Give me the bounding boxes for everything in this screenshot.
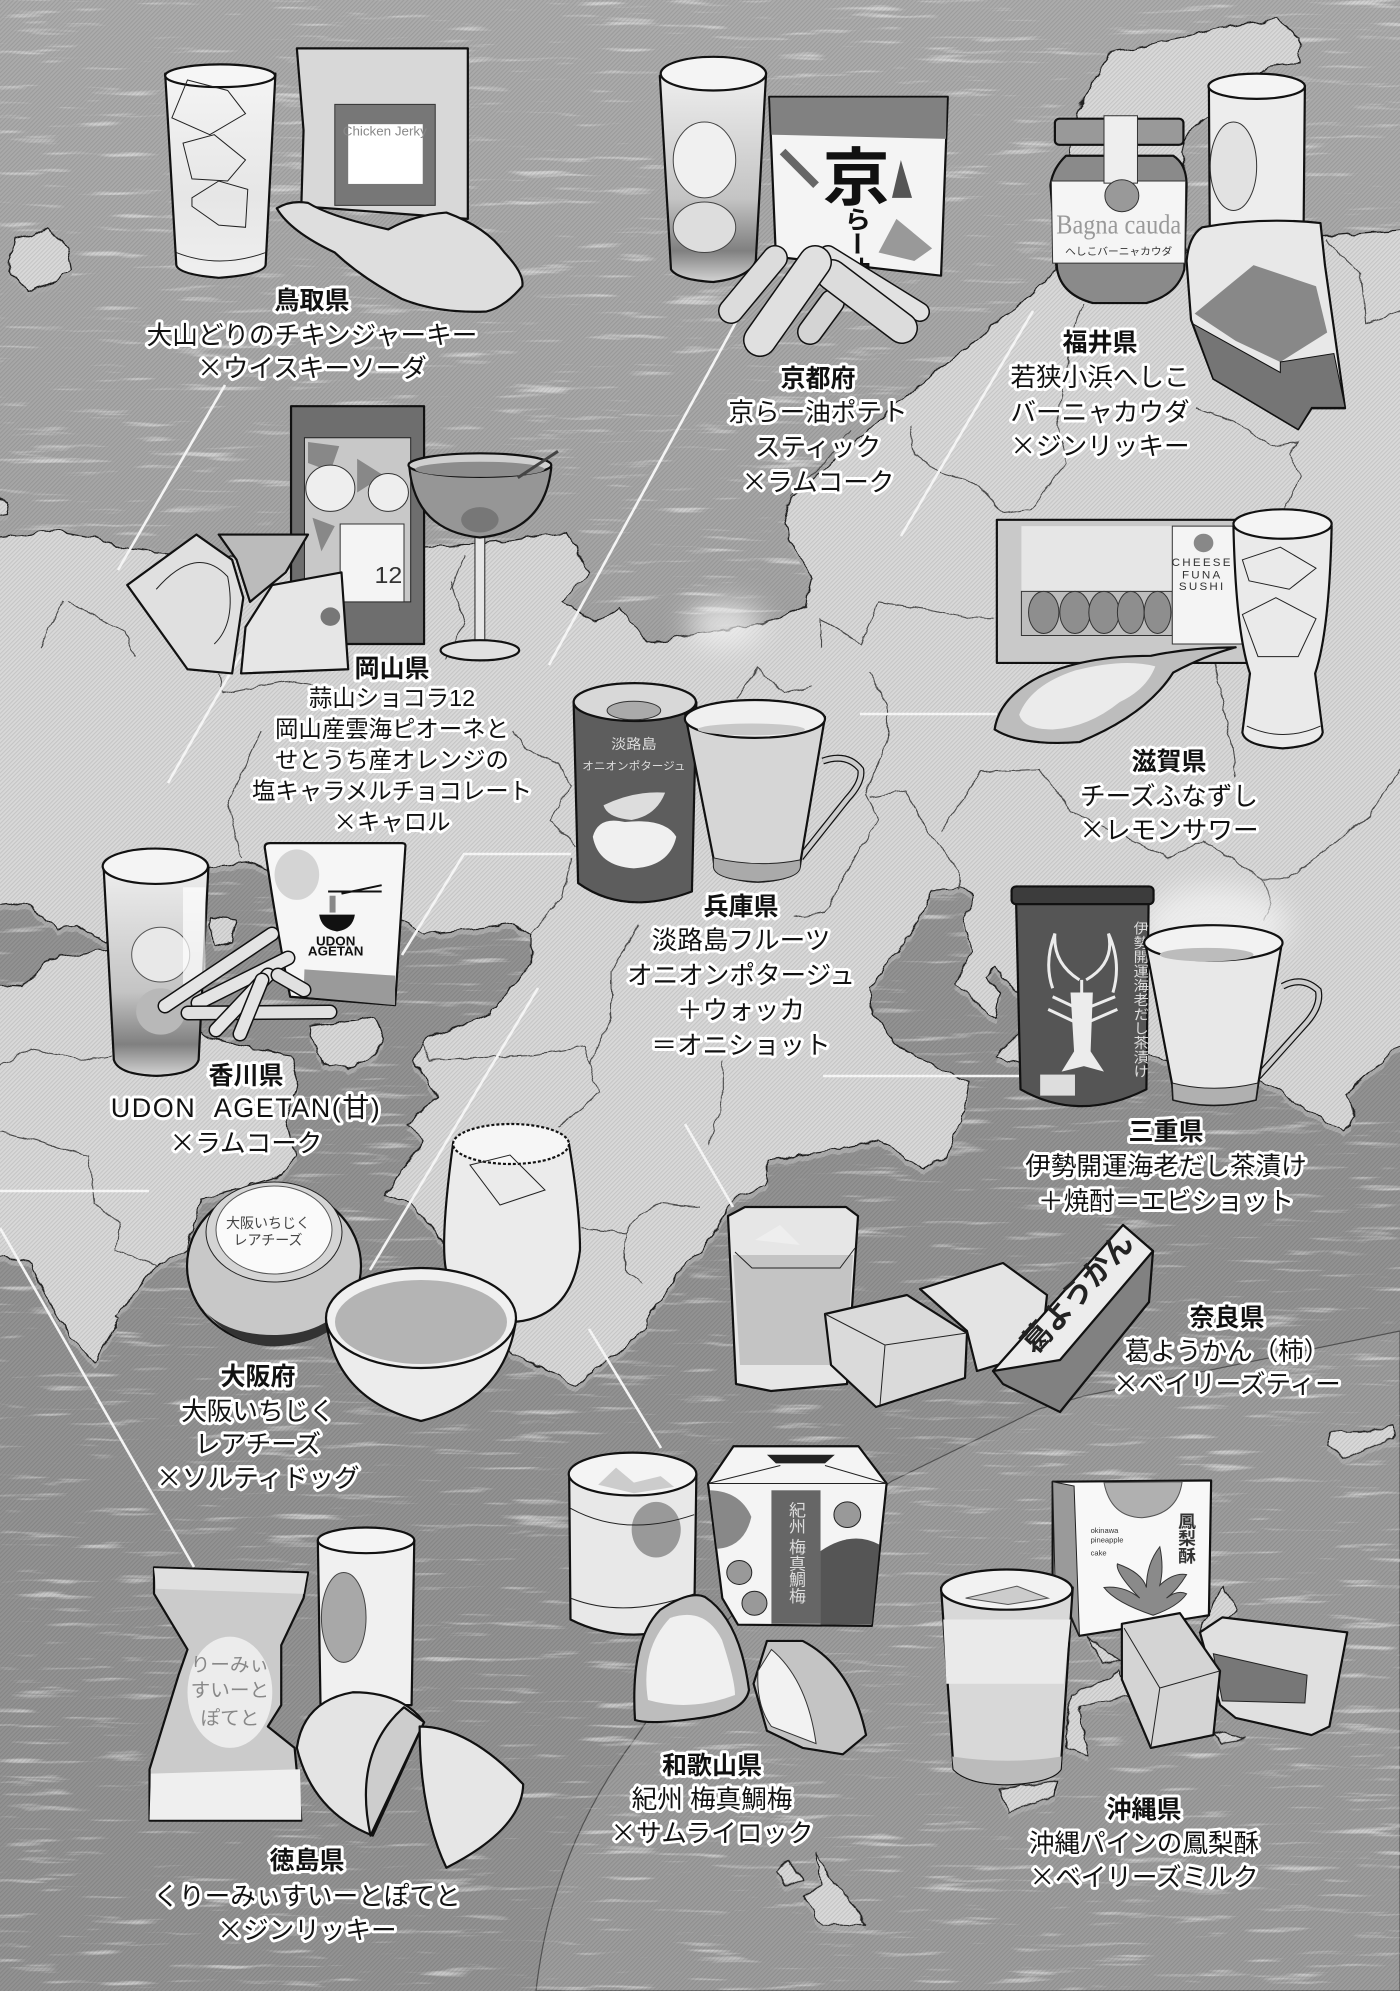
icon: chocolate pieces xyxy=(127,535,348,673)
label: Hyogo: オニオンポタージュ xyxy=(627,961,855,990)
food illustration: Hyogo xyxy=(574,683,696,902)
icon: manju half left xyxy=(634,1595,749,1722)
icon: onion potage can: オニオンポタージュ xyxy=(582,760,686,772)
icon: chicken jerky bag: Chicken Jerky xyxy=(343,124,427,138)
icon: ume tai box: 紀州 梅真鯛梅 xyxy=(786,1501,806,1604)
food illustration: Tottori xyxy=(165,48,523,312)
panel: Mie xyxy=(1012,886,1319,1216)
icon: ochazuke tin xyxy=(1012,886,1154,1106)
panel: Okinawa xyxy=(941,1480,1347,1894)
icon: bagna cauda jar: Bagna cauda xyxy=(1056,209,1181,240)
icon: chocolate box xyxy=(291,406,424,644)
food illustration: Kagawa xyxy=(103,843,405,1076)
panel: Tottori xyxy=(147,48,523,385)
map: southern islands xyxy=(776,1426,1393,1924)
map: Atsumi tip xyxy=(995,1030,1021,1063)
label: Tokushima: 徳島県 xyxy=(269,1847,345,1875)
label: Okinawa: 沖縄県 xyxy=(1106,1796,1182,1824)
label: Wakayama: 和歌山県 xyxy=(662,1752,762,1780)
icon: bagna cauda jar xyxy=(1050,116,1187,303)
icon: cheese funazushi slice xyxy=(995,647,1236,743)
label: Kagawa: ×ラムコーク xyxy=(170,1123,322,1160)
background: lighter open sea beyond curve xyxy=(536,1331,1400,1991)
icon: pineapple cake box: cake xyxy=(1091,1548,1107,1557)
label: Osaka: 大阪府 xyxy=(220,1363,296,1391)
label: Wakayama: 紀州 梅真鯛梅 xyxy=(632,1785,792,1814)
label: Kagawa: UDON AGETAN(甘) xyxy=(111,1093,381,1123)
label: Kyoto: ×ラムコーク xyxy=(742,462,894,499)
icon: cheese funazushi box: FUNA xyxy=(1182,570,1222,582)
icon: potato sticks xyxy=(731,255,920,340)
food illustration: Kyoto xyxy=(660,57,948,282)
icon: udon agetan bag xyxy=(265,843,405,1005)
map: top-left island xyxy=(0,227,71,516)
label: Kagawa: 香川県 xyxy=(208,1062,284,1090)
label: Okayama: 蒜山ショコラ12 xyxy=(309,685,475,711)
label: Fukui: バーニャカウダ xyxy=(1010,398,1190,427)
icon: baileys milk glass xyxy=(941,1569,1073,1784)
icon: samurai rock glass xyxy=(569,1453,696,1635)
panel: Osaka xyxy=(156,1124,580,1495)
label: Tottori: 大山どりのチキンジャーキー xyxy=(147,321,477,350)
icon: baileys tea glass xyxy=(728,1207,858,1391)
map: Awaji and small islands xyxy=(210,917,384,1068)
label: Kyoto: スティック xyxy=(755,434,881,462)
icon: fig rare cheese: レアチーズ xyxy=(233,1232,303,1248)
food illustration: Wakayama glass xyxy=(569,1453,696,1635)
icon: Kyoto chili oil potato stick bag xyxy=(769,97,948,282)
icon: fig rare cheese xyxy=(187,1182,361,1346)
icon: pineapple cake box: pineapple xyxy=(1091,1536,1123,1544)
label: Tokushima: くりーみぃすいーとぽてと xyxy=(153,1882,461,1911)
icon: gin rickey glass xyxy=(1208,74,1305,236)
icon: bagna cauda jar: へしこバーニャカウダ xyxy=(1065,245,1172,258)
icon: manju half right xyxy=(754,1641,866,1754)
panel: Fukui xyxy=(1010,74,1345,463)
icon: pineapple cake pieces xyxy=(1122,1613,1347,1748)
icon: sweet potato bag: すいーと xyxy=(191,1681,269,1701)
label: Okayama: 岡山産雲海ピオーネと xyxy=(275,716,509,742)
icon: yokan blocks xyxy=(825,1263,1047,1407)
label: Okayama: ×キャロル xyxy=(334,803,450,837)
panel: Kyoto xyxy=(660,57,948,499)
label: Kyoto: 京都府 xyxy=(780,365,856,393)
icon: toast with bagna cauda xyxy=(1187,221,1345,429)
icon: pineapple cake box: okinawa xyxy=(1091,1526,1119,1535)
icon: sweet potato halves xyxy=(297,1692,523,1868)
map: Honshu xyxy=(0,19,1400,1388)
label: Wakayama: ×サムライロック xyxy=(611,1813,813,1850)
label: Okayama: 岡山県 xyxy=(354,655,430,683)
panel: Wakayama xyxy=(569,1446,887,1850)
label: Okayama: せとうち産オレンジの xyxy=(275,747,509,773)
icon: onion potage can xyxy=(574,683,696,902)
map: soft white glows xyxy=(687,603,1290,965)
label: Fukui: 若狭小浜へしこ xyxy=(1010,363,1190,392)
icon: lemon sour glass xyxy=(1233,509,1332,748)
icon: soup bowl xyxy=(326,1268,516,1421)
label: Hyogo: ＋ウォッカ xyxy=(677,997,805,1025)
label: Tottori: 鳥取県 xyxy=(274,287,350,315)
label: Osaka: 大阪いちじく xyxy=(181,1397,335,1426)
panel: Kagawa xyxy=(103,843,405,1160)
leader lines xyxy=(0,311,1033,1567)
label: Shiga: 滋賀県 xyxy=(1131,748,1207,776)
food illustration: Okayama xyxy=(127,406,558,673)
icon: rum and coke glass xyxy=(660,57,766,282)
label: Fukui: ×ジンリッキー xyxy=(1010,426,1190,463)
food illustration: Mie xyxy=(1012,886,1319,1106)
panel: Okayama xyxy=(127,406,558,837)
icon: sweet potato bag: ぽてと xyxy=(200,1708,259,1729)
icon: rum and coke glass xyxy=(103,849,208,1076)
icon: onion potage can: 淡路島 xyxy=(611,737,657,753)
icon: fig rare cheese: 大阪いちじく xyxy=(226,1215,310,1231)
label: Nara: 奈良県 xyxy=(1189,1304,1265,1332)
map: prefecture borders xyxy=(0,240,1400,1283)
icon: onishot cup xyxy=(685,700,861,882)
label: Tottori: ×ウイスキーソーダ xyxy=(197,348,427,385)
food illustration: Okinawa xyxy=(941,1480,1347,1784)
icon: pineapple cake box xyxy=(1053,1480,1211,1636)
panel: Shiga xyxy=(995,509,1332,847)
label: Fukui: 福井県 xyxy=(1062,329,1138,357)
icon: Kyoto chili oil potato stick bag: らー油 xyxy=(841,206,872,282)
map: Shikoku xyxy=(0,950,299,1363)
icon: pineapple cake box: 鳳梨酥 xyxy=(1176,1513,1197,1564)
icon: udon agetan bag: AGETAN xyxy=(308,944,363,958)
label: Nara: 葛ようかん（柿） xyxy=(1125,1337,1329,1366)
panel: Nara xyxy=(728,1207,1341,1412)
label: Tokushima: ×ジンリッキー xyxy=(217,1910,397,1947)
label: Mie: ＋焼酎＝エビショット xyxy=(1038,1187,1294,1216)
label: Hyogo: ＝オニショット xyxy=(651,1032,831,1060)
icon: ume tai box xyxy=(708,1446,887,1626)
icon: yokan box xyxy=(993,1225,1153,1412)
label: Osaka: レアチーズ xyxy=(195,1430,321,1459)
label: Kyoto: 京らー油ポテト xyxy=(728,398,908,427)
icon: sweet potato bag: りーみぃ xyxy=(191,1655,269,1676)
label: Osaka: ×ソルティドッグ xyxy=(156,1458,360,1495)
icon: udon agetan bag: UDON xyxy=(316,934,355,948)
food illustration: funazushi slice xyxy=(995,647,1236,743)
icon: carol cocktail coupe xyxy=(408,451,558,660)
label: Nara: ×ベイリーズティー xyxy=(1113,1364,1341,1401)
label: Hyogo: 兵庫県 xyxy=(703,893,779,921)
food illustration: Shiga xyxy=(997,509,1332,748)
panel: Hyogo xyxy=(574,683,861,1060)
icon: salty dog glass xyxy=(444,1124,580,1322)
icon: chicken jerky bag xyxy=(297,48,468,219)
label: Shiga: ×レモンサワー xyxy=(1079,810,1259,847)
label: Okinawa: ×ベイリーズミルク xyxy=(1029,1857,1259,1894)
food illustration: Fukui xyxy=(1050,74,1345,429)
icon: udon fries xyxy=(165,934,330,1034)
food illustration: Tokushima xyxy=(150,1528,523,1868)
icon: whisky soda glass xyxy=(165,64,275,278)
icon: ochazuke tin: 伊勢開運海老だし茶漬け xyxy=(1131,921,1148,1079)
icon: Kyoto chili oil potato stick bag: 京 xyxy=(823,143,890,214)
icon: yokan box: 葛ようかん xyxy=(1015,1227,1140,1360)
icon: shochu cup xyxy=(1144,925,1319,1105)
label: Mie: 三重県 xyxy=(1128,1118,1204,1146)
label: Okayama: 塩キャラメルチョコレート xyxy=(252,778,532,804)
label: Hyogo: 淡路島フルーツ xyxy=(652,926,830,955)
icon: chicken jerky xyxy=(277,202,523,312)
icon: cheese funazushi box xyxy=(997,520,1247,663)
label: Okinawa: 沖縄パインの鳳梨酥 xyxy=(1029,1829,1259,1858)
label: Mie: 伊勢開運海老だし茶漬け xyxy=(1025,1152,1307,1181)
icon: cheese funazushi box: CHEESE xyxy=(1172,557,1233,569)
icon: gin rickey glass xyxy=(318,1528,414,1705)
panel: Tokushima xyxy=(150,1528,523,1947)
icon: sweet potato bag xyxy=(150,1567,308,1821)
icon: cheese funazushi box: SUSHI xyxy=(1179,581,1225,593)
icon: chocolate box: 12 xyxy=(374,563,402,589)
label: Shiga: チーズふなずし xyxy=(1080,782,1258,811)
